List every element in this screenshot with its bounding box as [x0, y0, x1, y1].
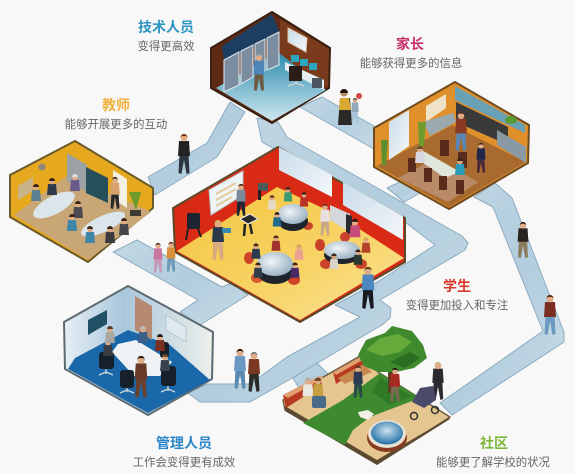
path: server room around classroom to manager room — [188, 118, 468, 402]
chair bases — [99, 369, 175, 393]
right brown wall — [280, 19, 329, 88]
round table group 1 — [268, 187, 313, 231]
heading: 家长 — [396, 36, 424, 52]
man in blue standing — [362, 267, 374, 309]
meeting table two — [78, 207, 128, 241]
heading: 社区 — [480, 435, 508, 451]
bench back — [333, 356, 372, 384]
window — [288, 28, 307, 52]
pathways network — [113, 97, 564, 415]
meeting table one — [29, 186, 79, 224]
blue floor — [68, 330, 210, 413]
fountain — [367, 420, 407, 452]
seated managers — [103, 326, 170, 371]
man in maroon shirt — [544, 295, 556, 335]
kitchen cabinets — [455, 86, 525, 133]
label: managers — [133, 435, 236, 469]
parent standing — [455, 112, 467, 151]
floor — [216, 52, 326, 121]
wall equipment — [186, 213, 201, 240]
seated child — [455, 158, 465, 175]
path: parents room to main path — [387, 181, 420, 202]
two people walking with bag — [234, 349, 260, 392]
child running — [476, 143, 486, 173]
community park — [283, 326, 450, 465]
back corner bright wall — [279, 147, 332, 197]
room: teacher lounge — [10, 141, 153, 262]
park ground — [283, 356, 450, 464]
description: 变得更加投入和专注 — [406, 298, 508, 312]
mother and child with balloon — [338, 89, 362, 125]
wall printer — [330, 205, 352, 236]
small desk — [258, 183, 268, 200]
ground edge — [285, 406, 450, 465]
description: 变得更高效 — [138, 39, 195, 53]
conference table — [112, 340, 172, 376]
description: 能够更了解学校的状况 — [436, 455, 551, 469]
man in red shirt — [390, 368, 400, 402]
left navy ceiling band — [222, 14, 280, 64]
heading: 学生 — [443, 278, 471, 294]
dog — [358, 410, 374, 420]
student by printer — [350, 219, 360, 237]
fridge — [497, 130, 526, 163]
skateboarder — [518, 222, 528, 258]
people on bench — [302, 378, 326, 408]
room: parents home — [374, 82, 529, 209]
plant — [129, 192, 141, 216]
wall screen — [88, 310, 107, 335]
label: community — [436, 435, 551, 469]
floor — [177, 187, 404, 320]
path: main path to community — [293, 363, 332, 398]
heading: 教师 — [102, 97, 130, 113]
technician — [253, 54, 265, 91]
label: technicians — [138, 19, 195, 53]
label: parents — [360, 36, 462, 70]
server racks — [224, 32, 279, 92]
standing student girl — [320, 204, 330, 236]
description: 能够获得更多的信息 — [360, 56, 462, 70]
dining chairs — [408, 140, 467, 194]
label: students — [406, 278, 508, 312]
description: 工作会变得更有成效 — [133, 455, 236, 469]
two girls walking — [154, 242, 176, 273]
standing manager — [135, 356, 147, 398]
rug — [398, 158, 478, 202]
lawn — [303, 373, 420, 445]
path: teacher room to server room — [148, 102, 245, 195]
cabinet — [67, 153, 87, 192]
wall clock — [38, 164, 46, 170]
path: server room to parents room — [300, 97, 376, 149]
door — [113, 170, 127, 208]
teacher at door — [110, 177, 120, 209]
plant at window — [381, 140, 388, 165]
round table group 2 — [244, 235, 304, 285]
interactive podium — [240, 214, 258, 236]
right wall window — [343, 182, 403, 240]
floor — [14, 175, 151, 260]
wall mirror — [166, 315, 186, 342]
bench left — [283, 376, 324, 408]
picture frame — [18, 177, 33, 200]
heading: 技术人员 — [138, 19, 194, 35]
whiteboard — [209, 171, 243, 215]
dining table — [416, 148, 460, 178]
green plant on cabinet — [505, 116, 517, 124]
room: server room — [211, 12, 330, 123]
people on paths — [154, 89, 556, 392]
description: 能够开展更多的互动 — [65, 117, 167, 131]
seated adult — [415, 146, 425, 163]
seated teachers — [31, 174, 129, 243]
office chairs — [99, 342, 176, 388]
path: teacher room to manager room — [113, 240, 248, 325]
standing student at wall — [236, 184, 246, 216]
wall window — [426, 94, 446, 122]
room: manager office — [64, 286, 213, 415]
jogger — [353, 366, 363, 398]
label: teachers — [65, 97, 167, 131]
teacher with tablet — [212, 220, 231, 260]
tree — [358, 326, 427, 393]
woman with stroller — [410, 362, 444, 420]
plant left — [418, 122, 426, 146]
room: classroom — [173, 147, 405, 322]
door — [135, 296, 152, 340]
woman in black walking — [178, 134, 190, 174]
sliding window — [389, 110, 409, 160]
floor — [377, 125, 526, 207]
vending machine — [86, 167, 108, 203]
path: parents room to community — [440, 183, 564, 415]
round table group 3 — [315, 232, 370, 269]
workstation with blue monitors — [285, 55, 324, 90]
kitchen island — [423, 113, 456, 136]
heading: 管理人员 — [156, 435, 212, 451]
